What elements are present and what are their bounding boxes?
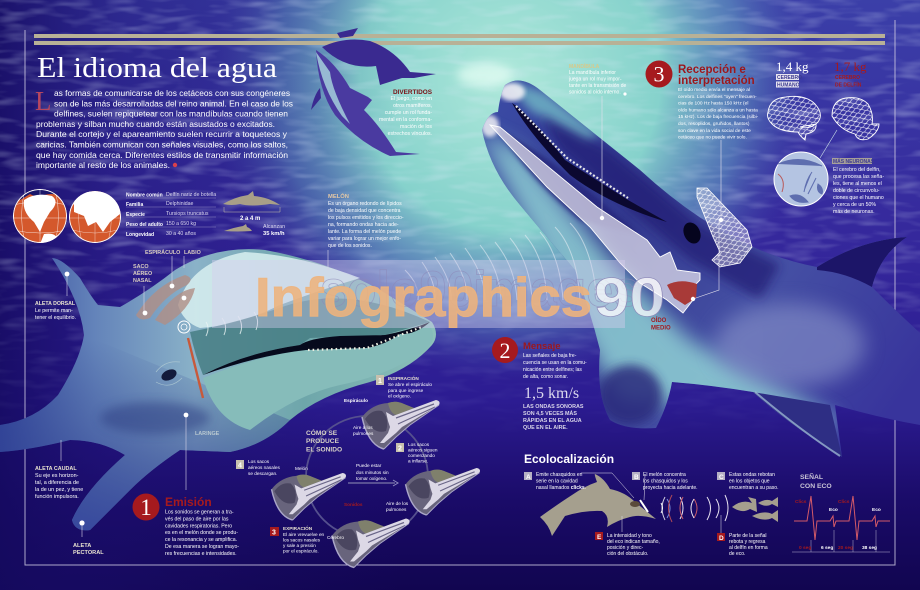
larynx tube xyxy=(188,338,203,398)
step 4: descarga: dos minutos sin xyxy=(356,470,389,475)
eye xyxy=(680,220,704,246)
echolocation step B: B xyxy=(634,474,639,481)
text: más neuronas: que procesa las seña- xyxy=(833,174,884,180)
echolocation dolphin xyxy=(540,473,656,536)
mouth xyxy=(512,103,667,222)
heading: cómo se produce el sonido: EL SONIDO xyxy=(306,446,342,454)
intro paragraph: importante al resto de los animales. xyxy=(36,160,170,170)
label: melón xyxy=(328,192,404,270)
chart labels: Eco xyxy=(872,507,881,513)
heading: cómo se produce el sonido: CÓMO SE xyxy=(306,428,338,437)
echolocation step C xyxy=(717,472,778,491)
chart labels: 20 seg xyxy=(838,545,853,551)
cycle ring xyxy=(306,416,428,538)
echo sound waves xyxy=(661,495,728,522)
echolocation step C: Estas ondas rebotan xyxy=(729,472,775,478)
step 1: inspiración: Se abre el espiráculo xyxy=(388,382,432,387)
label: aleta pectoral: PECTORAL xyxy=(73,550,104,556)
step 4: descarga: 4 xyxy=(238,462,242,470)
step 1: inspiración: el oxígeno. xyxy=(388,394,411,398)
label: aleta dorsal: tener el equilibrio. xyxy=(35,315,76,321)
step 4: descarga: tomar oxígeno. xyxy=(356,476,387,481)
label: aleta dorsal xyxy=(35,301,76,321)
section: recepción e interpretación: cerebro. Los delfines "oyen" frecuen- xyxy=(678,94,757,100)
icon: human brain xyxy=(768,96,820,140)
speed note: RÁPIDAS EN EL AGUA xyxy=(523,417,582,424)
text: divertidos: mación de los xyxy=(400,124,432,130)
number badge 3 xyxy=(646,60,672,88)
step 2: inflado: pulmones xyxy=(386,507,407,512)
species data table: Delphinidae xyxy=(166,201,194,207)
species data table: Nombre común xyxy=(126,192,163,198)
section: emisión: Los sonidos se generan a tra- xyxy=(165,510,234,516)
species data table: Delfín nariz de botella xyxy=(166,192,216,198)
echolocation step D: al delfín en forma xyxy=(729,545,768,551)
upper head dark xyxy=(540,115,780,300)
section: emisión: De esa manera se logran mayo- xyxy=(165,544,239,550)
label: aleta caudal: ALETA CAUDAL xyxy=(35,466,77,472)
section: mensaje: cuencia se usan en la comu- xyxy=(523,360,587,366)
section: mensaje: de alta, como sonar. xyxy=(523,374,568,380)
chart labels: Clics xyxy=(795,499,807,505)
section: recepción e interpretación: son clave en la vida social de este xyxy=(678,128,751,134)
number badge 1: 1 xyxy=(140,495,152,520)
echolocation step D: Parte de la señal xyxy=(729,533,767,539)
chart: señal con eco xyxy=(792,472,890,552)
step 1: inspiración: 1 xyxy=(378,378,382,385)
label: mandíbula: MANDÍBULA xyxy=(569,62,600,70)
label: aleta dorsal: ALETA DORSAL xyxy=(35,301,76,307)
species data table: Tursiops truncatus xyxy=(166,211,209,217)
echolocation step A: nasal llamados clicks. xyxy=(536,485,586,491)
drop cap: L xyxy=(35,86,52,116)
label: oído medio xyxy=(651,316,671,332)
number badge 3: 3 xyxy=(654,62,664,86)
step 4: descarga: Los sacos xyxy=(248,459,270,464)
label: aleta caudal xyxy=(35,440,83,500)
echolocation step C: encuentran a su paso. xyxy=(729,485,778,491)
size and speed icons: 35 km/h xyxy=(263,231,285,237)
step 2: inflado: comenzando xyxy=(408,453,435,458)
step 3: expiración: El aire vrevuelve en xyxy=(283,532,325,537)
diagram 2 xyxy=(406,468,480,515)
echolocation step E: posición y direc- xyxy=(607,545,643,551)
intro paragraph xyxy=(35,86,294,170)
brain weights: human: CEREBRO xyxy=(777,75,802,81)
label: aleta dorsal: Le permite man- xyxy=(35,308,73,314)
brain weights: human: 1,4 kg xyxy=(776,59,809,74)
step 4: descarga: Melón xyxy=(295,466,308,471)
step 3: expiración: Sonidos xyxy=(344,502,363,507)
section: recepción e interpretación: El oído medio envía el mensaje al xyxy=(678,87,750,93)
label: melón: de baja densidad que concentra xyxy=(328,208,401,214)
watermark outline text: solo90images xyxy=(320,261,640,317)
title: El idioma del agua xyxy=(37,52,277,84)
brain weights: human: HUMANO xyxy=(777,82,800,88)
intro paragraph: caricias. También comunican con señales visuales, como los saltos, xyxy=(36,140,288,150)
step 3: expiración: Cerebro xyxy=(327,535,344,540)
left dolphin callouts xyxy=(65,256,188,526)
label: melón: que de los sonidos. xyxy=(328,243,372,249)
section: recepción e interpretación: interpretación xyxy=(678,75,755,87)
dorsal fin dark xyxy=(817,237,907,287)
text: más neuronas: les, tiene al menos el xyxy=(833,181,882,187)
lower dolphin xyxy=(316,50,420,156)
label: aleta pectoral: ALETA xyxy=(73,543,91,549)
text: divertidos: DIVERTIDOS xyxy=(393,89,433,96)
melon xyxy=(178,252,360,328)
text: divertidos xyxy=(379,89,433,137)
echolocation step B: El melón concentra xyxy=(643,472,686,478)
brain weights: dolphin xyxy=(834,59,867,88)
echolocation step D xyxy=(717,515,768,557)
section: emisión: cavidades respiratorias. Pero xyxy=(165,523,232,529)
small dolphins: divertidos xyxy=(311,28,436,156)
top double rule xyxy=(34,34,885,45)
echolocation step B xyxy=(632,472,697,491)
sound production cycle xyxy=(236,374,480,568)
icon: dolphin brain xyxy=(832,98,879,140)
chart title xyxy=(800,472,832,490)
species data table: 150 a 650 kg xyxy=(166,221,196,227)
end mark xyxy=(173,163,177,167)
echolocation step B: proyecta hacia adelante. xyxy=(643,485,697,491)
chart labels: Clics xyxy=(838,499,850,505)
label: melón: MELÓN xyxy=(328,192,349,200)
chart labels: 38 seg xyxy=(862,545,877,551)
middle ear xyxy=(667,281,697,305)
section: recepción e interpretación xyxy=(678,64,759,141)
step 3: expiración: 3 xyxy=(272,530,276,536)
text: más neuronas: ciones que el humano xyxy=(833,195,884,201)
echolocation step A: Emite chasquidos en xyxy=(536,472,583,478)
text: más neuronas: doble de circunvolu- xyxy=(833,188,880,194)
upper dolphin xyxy=(322,39,436,85)
chart labels: 6 seg xyxy=(821,545,833,551)
diagram 1 xyxy=(362,400,440,449)
step 2: inflado: Aire de los xyxy=(386,501,409,506)
intro paragraph: problemas y silban mucho cuando están asustados o excitados. xyxy=(36,119,275,129)
label: aleta caudal: tal, a diferencia de xyxy=(35,480,79,486)
section: mensaje xyxy=(523,341,587,431)
signal line xyxy=(794,496,890,540)
section: recepción e interpretación: oído humano sólo alcanza a un hasta xyxy=(678,107,758,113)
step 2: inflado: aéreos siguen xyxy=(408,448,438,452)
size and speed icons: 2 a 4 m xyxy=(240,216,260,222)
label: oído medio: OÍDO xyxy=(651,316,667,324)
section: emisión: vés del paso de aire por las xyxy=(165,516,229,522)
echolocation step C: C xyxy=(719,474,724,481)
upper jaw xyxy=(190,298,430,375)
step 1: inspiración: pulmones xyxy=(353,431,374,436)
echolocation step D: rebota y regresa xyxy=(729,539,766,545)
echolocation step E xyxy=(595,532,660,557)
brain overlay in dolphin xyxy=(697,188,752,267)
label: mandíbula: juega un rol muy impor- xyxy=(568,76,622,82)
chart labels: 0 seg xyxy=(799,545,811,551)
step 1: inspiración: INSPIRACIÓN xyxy=(388,374,419,381)
section: mensaje: Las señales de baja fre- xyxy=(523,353,577,359)
label: mandíbula: tante en la transmisión de xyxy=(569,83,626,89)
head top fade xyxy=(505,80,600,142)
diagram 3 xyxy=(332,518,410,568)
label: melón: lante. La forma del melón puede xyxy=(328,229,401,235)
text: más neuronas: más de neuronas. xyxy=(833,209,875,215)
label: melón: Es un órgano redondo de lípidos xyxy=(328,201,402,207)
text: más neuronas: El cerebro del delfín, xyxy=(833,167,881,173)
text: divertidos: mental en la conforma- xyxy=(379,117,432,123)
sound source rings xyxy=(178,321,190,333)
echolocation step E: ción del obstáculo. xyxy=(607,551,648,557)
section: recepción e interpretación: cias de 100 Hz hasta 150 kHz (el xyxy=(678,101,748,107)
snout highlights xyxy=(499,83,525,101)
icon: dolphin silhouette xyxy=(223,191,280,206)
heading: cómo se produce el sonido xyxy=(306,428,342,454)
text: divertidos: cumple un rol funda- xyxy=(385,110,432,116)
label: melón: variar para lograr un mejor enfo- xyxy=(328,236,401,242)
label: melón: los pulsos emitidos y los direccio- xyxy=(328,215,404,221)
brain weights: dolphin: 1,7 kg xyxy=(834,59,867,74)
flank shading xyxy=(715,303,865,387)
step 2: inflado: Los sacos xyxy=(408,442,430,447)
step 2: inflado: a inflarse. xyxy=(408,458,428,464)
labels: head anatomy xyxy=(133,249,220,437)
step 4: descarga xyxy=(236,459,389,481)
brain weights: dolphin: DE DELFÍN xyxy=(835,80,862,88)
labels: head anatomy: ESPIRÁCULO xyxy=(145,249,180,256)
section: recepción e interpretación: dos, resoplidos, gruñidos, llantos) xyxy=(678,121,750,127)
chart axis xyxy=(792,530,890,552)
step 4: descarga: se descargan. xyxy=(248,471,277,476)
speed note: SON 4,5 VECES MÁS xyxy=(523,410,577,417)
intro paragraph: que hay comida cerca. Diferentes estilos de transmitir información xyxy=(36,150,288,160)
globes: distribution map xyxy=(13,189,121,246)
labels: head anatomy: LABIO xyxy=(184,250,201,256)
section: mensaje: Mensaje xyxy=(523,341,560,352)
lower jaw xyxy=(203,326,433,430)
section: mensaje: nicación entre delfines; las xyxy=(523,367,582,373)
fish school xyxy=(732,497,778,522)
species data table: Longevidad xyxy=(126,232,154,238)
chart title: SEÑAL xyxy=(800,472,823,481)
left dolphin xyxy=(0,249,436,530)
species data table xyxy=(126,192,216,238)
brain weights: human xyxy=(776,59,809,88)
eye xyxy=(160,367,178,383)
diagram 4 xyxy=(272,473,346,520)
number badge 1 xyxy=(132,494,160,520)
label: mandíbula xyxy=(568,62,626,96)
text: más neuronas: MÁS NEURONAS xyxy=(833,158,875,165)
size and speed icons xyxy=(223,191,285,237)
step 1: inspiración xyxy=(344,374,432,436)
section: recepción e interpretación: Recepción e xyxy=(678,64,746,76)
echolocation step A: A xyxy=(526,474,531,481)
speed note: LAS ONDAS SONORAS xyxy=(523,404,584,410)
mouth xyxy=(203,322,430,375)
heading: cómo se produce el sonido: PRODUCE xyxy=(306,438,340,445)
label: aleta caudal: función impulsora. xyxy=(35,494,79,500)
species data table: Familia xyxy=(126,202,143,208)
labels: head anatomy: SACO xyxy=(133,264,149,270)
echolocation step D: D xyxy=(719,535,724,542)
label: mandíbula: sonidos al oído interno. xyxy=(569,90,621,96)
melon ribs xyxy=(206,312,258,336)
label: aleta pectoral xyxy=(73,526,104,556)
step 3: expiración: por el espiráculo. xyxy=(283,548,319,554)
step 1: inspiración: Aire a los xyxy=(353,425,373,430)
section: emisión: es en el melón donde se produ- xyxy=(165,530,238,536)
echolocation step B: los chasquidos y los xyxy=(643,478,688,484)
label: oído medio: MEDIO xyxy=(651,326,671,332)
number badge 2: 2 xyxy=(500,338,510,363)
label: aleta caudal: la de un pez, y tiene xyxy=(35,487,83,493)
number badge 2 xyxy=(492,337,518,363)
speed figure: 1,5 km/s xyxy=(524,385,579,402)
speed note xyxy=(523,404,584,431)
echolocation step E: del eco indican tamaño, xyxy=(607,539,660,545)
annotation dots right xyxy=(600,92,723,301)
arrow: resting xyxy=(348,480,398,486)
speed note: QUE EN EL AIRE. xyxy=(523,425,568,431)
step 3: expiración: los sacos nasales xyxy=(283,538,321,542)
step 3: expiración: y sale a presión xyxy=(283,543,316,548)
watermark numerals: 90 xyxy=(594,266,665,328)
step 2: inflado: 2 xyxy=(398,446,402,452)
dark face patch xyxy=(100,402,210,434)
intro paragraph: son de las más desarrolladas del reino animal. En el caso de los xyxy=(54,98,294,108)
label: mandíbula: La mandíbula inferior xyxy=(569,70,616,76)
step 4: descarga: Puede estar xyxy=(356,463,382,468)
chart title: CON ECO xyxy=(800,483,832,490)
watermark band xyxy=(212,260,665,328)
echolocation step E: La intensidad y tono xyxy=(607,533,652,539)
species data table: Peso del adulto xyxy=(126,222,163,228)
species data table: Especie xyxy=(126,212,145,218)
intro paragraph: as formas de comunicarse de los cetáceos con sus congéneres xyxy=(54,88,291,98)
step 4: descarga: aéreos nasales xyxy=(248,465,280,470)
dark lower jaw xyxy=(497,128,640,235)
step 1: inspiración: para que ingrese xyxy=(388,388,424,393)
step 1: inspiración: Espiráculo xyxy=(344,398,368,403)
step 3: expiración xyxy=(270,502,363,554)
step 3: expiración: EXPIRACIÓN xyxy=(283,524,313,531)
annotation lines right xyxy=(602,96,721,299)
text: divertidos: El juego, como en xyxy=(390,96,432,102)
text: divertidos: estrechos vínculos. xyxy=(388,131,432,137)
text: más neuronas: y cerca de un 50% xyxy=(833,202,876,208)
section: emisión: ce la resonancia y se amplifica. xyxy=(165,537,237,543)
label: aleta caudal: Su eje es horizon- xyxy=(35,473,79,479)
step 2: inflado xyxy=(386,442,438,512)
right dolphin xyxy=(470,70,920,470)
size and speed icons: Alcanzan xyxy=(263,224,285,230)
sound wave arcs xyxy=(405,223,597,300)
section: recepción e interpretación: cetáceo que no puede vivir solo. xyxy=(678,135,747,141)
section: emisión: Emisión xyxy=(165,495,212,509)
section: emisión xyxy=(165,495,239,557)
text: divertidos: otros mamíferos, xyxy=(393,103,432,109)
chart labels xyxy=(795,499,881,551)
icon: small dolphin silhouette xyxy=(224,224,252,232)
species data table: 30 a 40 años xyxy=(166,231,196,237)
globe: Asia xyxy=(69,191,121,243)
labels: head anatomy: AÉREO xyxy=(133,269,152,277)
chart labels: Eco xyxy=(829,507,838,513)
echolocation step A: serie en la cavidad xyxy=(536,478,578,484)
label: melón: na, formando ondas hacia ade- xyxy=(328,222,399,228)
icon: brain magnifier xyxy=(774,130,837,206)
labels: head anatomy: LARINGE xyxy=(195,431,220,437)
watermark main text: Infographics xyxy=(255,266,592,328)
echolocation step E: E xyxy=(597,534,602,541)
throat light xyxy=(478,130,840,450)
echolocation step D: de eco. xyxy=(729,551,745,557)
globe: Americas xyxy=(13,189,67,246)
brain weights: dolphin: CEREBRO xyxy=(835,75,860,81)
labels: head anatomy: NASAL xyxy=(133,278,152,284)
intro paragraph: delfines, suelen repiquetear con las mandíbulas cuando tienen xyxy=(54,109,288,119)
text: más neuronas xyxy=(832,158,884,215)
section: emisión: res frecuencias e intensidades. xyxy=(165,551,237,557)
mandible overlay xyxy=(490,125,700,313)
ecolocalización heading: Ecolocalización xyxy=(524,452,614,466)
section: recepción e interpretación: 15 kHz). Los de baja frecuencia (silbi- xyxy=(678,114,759,120)
echolocation step C: en los objetos que xyxy=(729,478,770,484)
intro paragraph: Durante el cortejo y el apareamiento suelen recurrir a toqueteos y xyxy=(36,129,288,139)
nasal air sacs xyxy=(136,275,195,325)
echolocation step A xyxy=(524,472,586,491)
